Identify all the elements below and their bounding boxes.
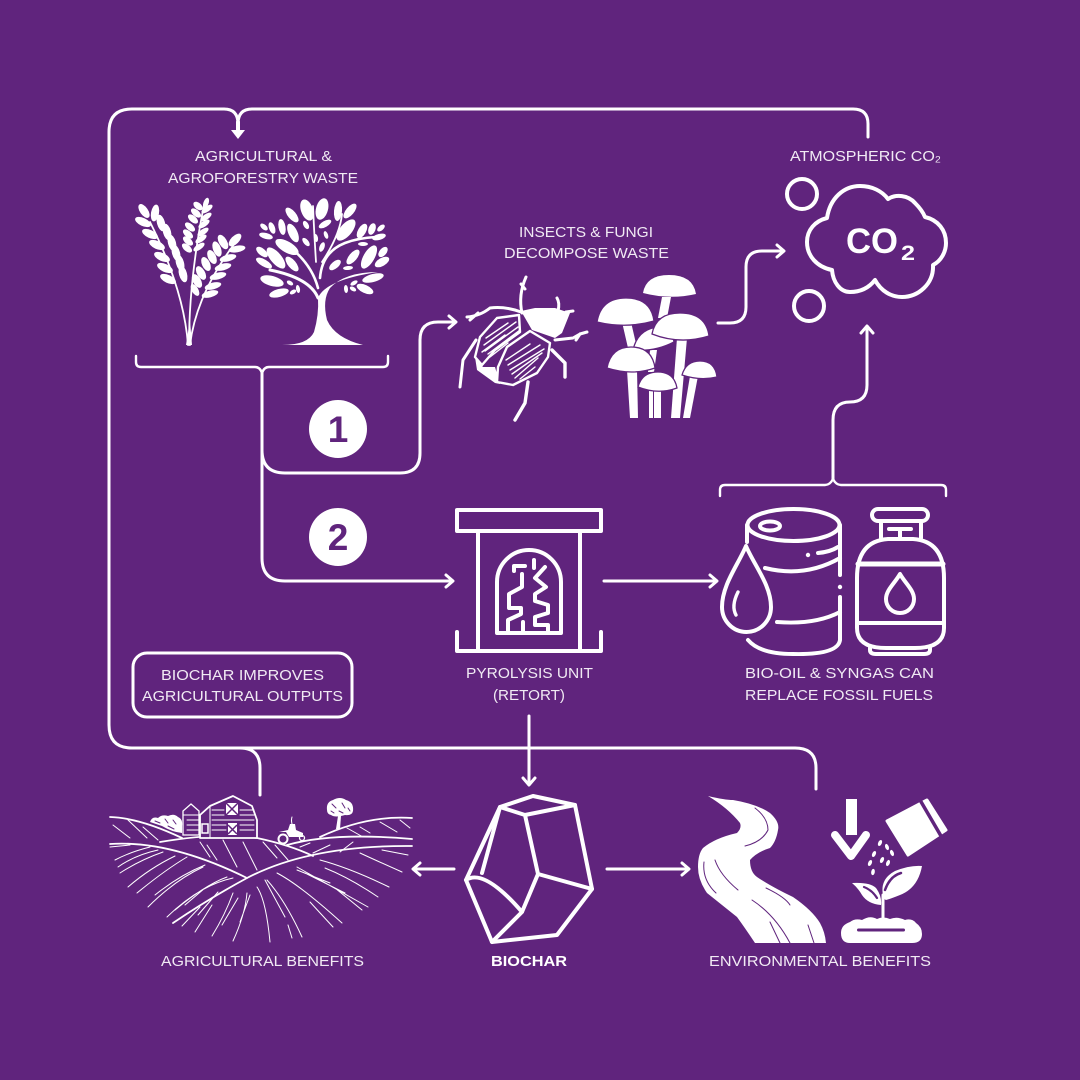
label: pyrolysis unit: (RETORT)	[493, 687, 565, 704]
icon: pyrolysis unit	[457, 510, 601, 651]
arrow: pyrolysis to oil and gas	[604, 575, 717, 587]
tree	[327, 798, 353, 829]
icon: CO2 cloud: 2	[901, 242, 915, 265]
heading: insects and fungi decompose waste	[504, 224, 669, 262]
field furrows	[110, 820, 410, 942]
icon: CO2 cloud	[787, 179, 946, 321]
label: bio-oil and syngas	[745, 665, 934, 704]
label: environmental benefits: ENVIRONMENTAL BENEFITS	[709, 953, 931, 970]
arrow: oil and gas bracket to atmosphere	[720, 326, 946, 496]
arrow: biochar to environmental benefits	[607, 863, 689, 875]
icon: tree	[254, 197, 391, 345]
heading: atmospheric CO2: ATMOSPHERIC CO₂	[790, 148, 941, 165]
callout: biochar improves agricultural outputs	[133, 653, 352, 717]
arrow: biochar to agricultural benefits	[413, 863, 454, 875]
arrow: pyrolysis to biochar	[523, 716, 535, 785]
icon: oil barrel with droplet	[722, 509, 842, 654]
label: agricultural benefits: AGRICULTURAL BENEFITS	[161, 953, 364, 970]
barn and silo	[183, 796, 257, 838]
callout: biochar improves agricultural outputs: BIOCHAR IMPROVES	[161, 667, 324, 684]
icon: biochar chunk	[466, 796, 592, 942]
heading: insects and fungi decompose waste: DECOMPOSE WASTE	[504, 245, 669, 262]
label: pyrolysis unit	[466, 665, 593, 704]
label: bio-oil and syngas: BIO-OIL & SYNGAS CAN	[745, 665, 934, 682]
icon: mushrooms	[597, 275, 717, 418]
icon: gas cylinder	[857, 509, 944, 654]
bushes	[150, 815, 182, 833]
arrow: waste bracket with route 1 to insects and route 2 to pyrolysis	[136, 316, 456, 587]
heading: agricultural and agroforestry waste: AGROFORESTRY WASTE	[168, 170, 358, 187]
badge: number 1	[309, 400, 367, 458]
badge: number 2: 2	[328, 517, 348, 558]
icon: CO2 cloud: CO	[846, 222, 898, 261]
heading: agricultural and agroforestry waste	[168, 148, 358, 187]
icon: biochar applied from a tilted container	[867, 800, 946, 875]
heading: insects and fungi decompose waste: INSECTS & FUNGI	[519, 224, 653, 241]
arrow: decomposition releases CO2	[718, 245, 784, 323]
icon: wheat stalks	[134, 197, 246, 345]
icon: beetle	[460, 277, 587, 420]
badge: number 2	[309, 508, 367, 566]
icon: sprouting plant in soil	[841, 866, 922, 943]
badge: number 1: 1	[328, 409, 348, 450]
label: pyrolysis unit: PYROLYSIS UNIT	[466, 665, 593, 682]
callout: biochar improves agricultural outputs: AGRICULTURAL OUTPUTS	[142, 688, 343, 705]
icon: down arrow	[835, 799, 866, 856]
illustration: farm fields with barn, tractor and tree	[110, 796, 412, 942]
field contour lines	[110, 817, 412, 923]
label: biochar: BIOCHAR	[491, 953, 567, 970]
illustration: winding river	[698, 796, 826, 943]
tractor	[278, 817, 304, 844]
label: bio-oil and syngas: REPLACE FOSSIL FUELS	[745, 687, 933, 704]
heading: agricultural and agroforestry waste: AGRICULTURAL &	[195, 148, 332, 165]
arrow: recycling loop from atmosphere and farm back to waste	[109, 109, 868, 795]
